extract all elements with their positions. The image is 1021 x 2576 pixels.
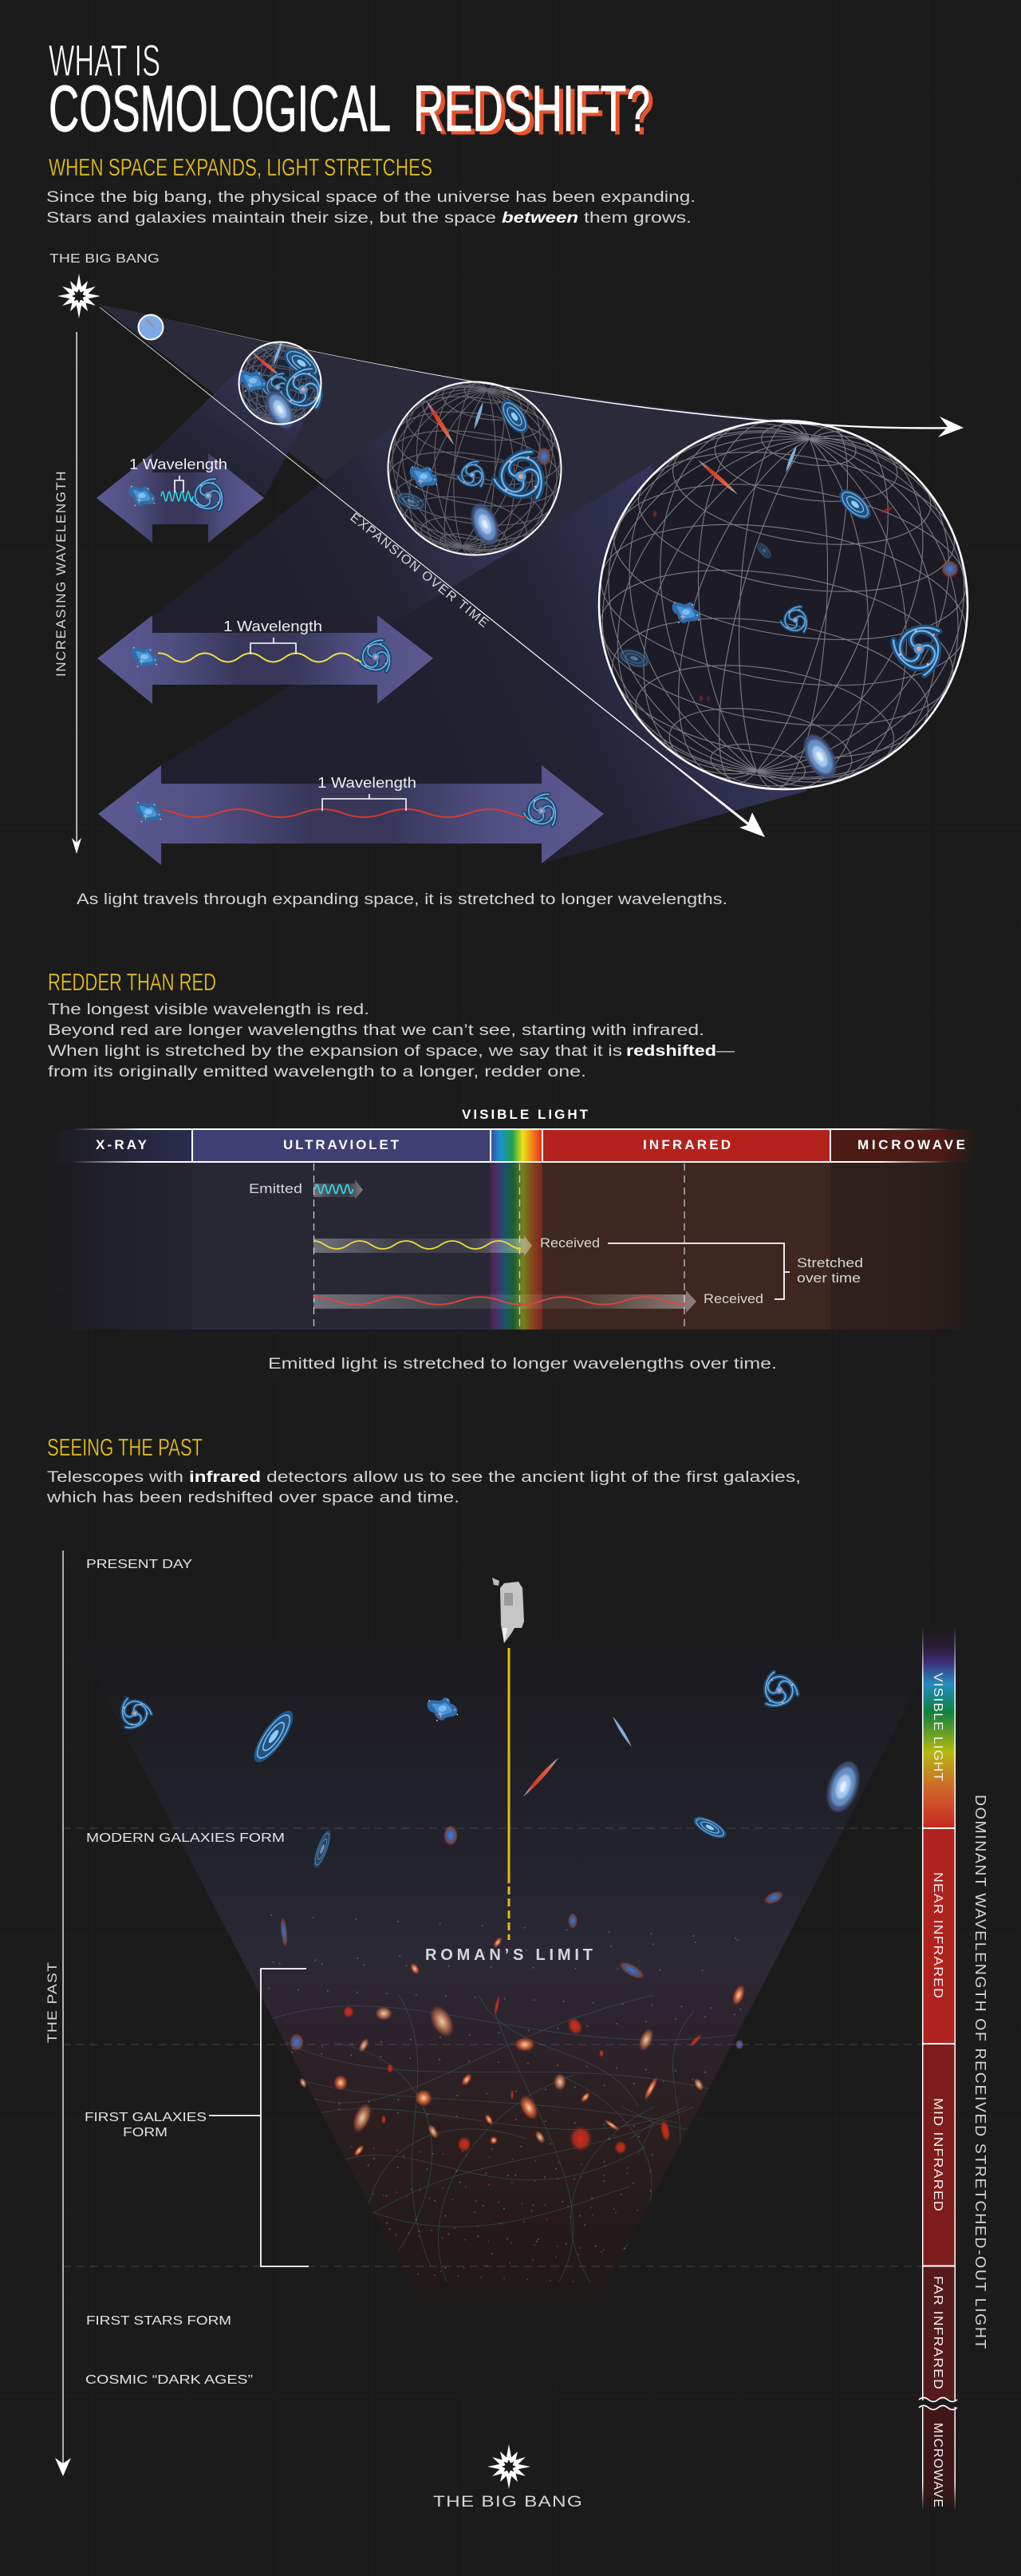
- wavelength bar: [917, 1626, 960, 2511]
- line: expansion over time: [100, 307, 765, 837]
- arrow: increasing wavelength: [53, 332, 81, 854]
- label: visible light: VISIBLE LIGHT: [462, 1107, 589, 1122]
- label: the big bang: THE BIG BANG: [49, 252, 160, 266]
- intro text: them grows.: [584, 210, 692, 227]
- emitted wave: [249, 1179, 363, 1199]
- icon: big bang star lower: [487, 2444, 530, 2489]
- wavelength bar: VISIBLE LIGHT: [931, 1673, 944, 1782]
- galaxies: redshifted: [279, 1888, 786, 2158]
- epoch dashed lines: [63, 1828, 922, 2266]
- timeline labels: PRESENT DAY: [86, 1558, 192, 1571]
- wavelength arrow: medium: 1 Wavelength: [223, 618, 322, 634]
- title: REDSHIFT?: [413, 73, 650, 145]
- arrow: increasing wavelength: INCREASING WAVELENGTH: [53, 470, 69, 677]
- title: COSMOLOGICAL: [49, 73, 391, 145]
- timeline labels: MODERN GALAXIES FORM: [86, 1831, 285, 1845]
- timeline arrow: the past: [45, 1551, 71, 2476]
- intro text: Stars and galaxies maintain their size, but the space: [46, 210, 496, 227]
- wavelength arrow: long: [98, 765, 604, 865]
- redder text: [48, 1002, 735, 1081]
- wavelength bar: FAR INFRARED: [931, 2276, 944, 2390]
- expansion cone: [100, 305, 798, 790]
- curve: expansion upper edge: [97, 303, 964, 437]
- dashed guides: [314, 1164, 684, 1329]
- emitted wave: Emitted: [249, 1181, 302, 1196]
- galaxy: red edge-on: [696, 458, 739, 496]
- intro text: [46, 189, 696, 227]
- label: expansion over time: EXPANSION OVER TIME: [347, 511, 491, 631]
- redder text: The longest visible wavelength is red.: [48, 1002, 369, 1018]
- caption: emitted light: Emitted light is stretched to longer wavelengths over time.: [268, 1356, 777, 1373]
- seeing text: Telescopes with: [47, 1469, 183, 1486]
- wavelength arrow: medium: [97, 615, 433, 704]
- caption: stretching: As light travels through expanding space, it is stretched to longer wavelengths.: [77, 891, 727, 908]
- observation cone: [78, 1644, 940, 2474]
- received wave: red: Received: [704, 1291, 763, 1306]
- light beams: [152, 369, 807, 863]
- label: dominant wavelength: DOMINANT WAVELENGTH OF RECEIVED STRETCHED-OUT LIGHT: [972, 1795, 988, 2350]
- timeline labels: FIRST STARS FORM: [86, 2314, 231, 2328]
- bracket: stretched over time: over time: [797, 1270, 861, 1286]
- title: REDSHIFT?: [417, 76, 654, 148]
- seeing text: infrared: [189, 1469, 261, 1486]
- wavelength bar: NEAR INFRARED: [931, 1872, 944, 1999]
- telescope: [492, 1578, 524, 1643]
- title: [49, 35, 654, 148]
- redder text: from its originally emitted wavelength to a longer, redder one.: [48, 1064, 586, 1081]
- redder text: redshifted: [626, 1043, 716, 1060]
- seeing text: which has been redshifted over space and time.: [46, 1489, 459, 1507]
- wavelength bar: MICROWAVE: [931, 2423, 944, 2508]
- heading: seeing the past: SEEING THE PAST: [47, 1433, 203, 1461]
- intro text: Since the big bang, the physical space of the universe has been expanding.: [46, 189, 696, 206]
- galaxies: present-day: [113, 1665, 865, 1870]
- bracket: first galaxies: [209, 1969, 309, 2266]
- title: WHAT IS: [49, 35, 160, 85]
- wavelength arrow: short: [97, 453, 264, 543]
- sphere: large universe: [507, 334, 1021, 876]
- received wave: yellow: Received: [540, 1235, 600, 1250]
- heading: redder than red: REDDER THAN RED: [48, 968, 216, 996]
- timeline arrow: the past: THE PAST: [45, 1962, 60, 2043]
- redder text: When light is stretched by the expansion of space, we say that it is: [48, 1043, 622, 1060]
- spectrum bar: INFRARED: [643, 1137, 731, 1152]
- timeline labels: FIRST GALAXIES: [85, 2111, 207, 2124]
- sphere: earliest universe: [139, 314, 163, 340]
- intro text: between: [502, 210, 578, 227]
- spectrum bar: X-RAY: [96, 1137, 148, 1152]
- spectrum bar: ULTRAVIOLET: [283, 1137, 400, 1152]
- wavelength arrow: short: 1 Wavelength: [129, 456, 227, 472]
- spectrum bar: [39, 1128, 977, 1163]
- received wave: red: [294, 1290, 763, 1313]
- bracket: stretched over time: [608, 1243, 863, 1299]
- line: roman sight line: [507, 1648, 510, 1940]
- seeing text: detectors allow us to see the ancient light of the first galaxies,: [266, 1469, 801, 1486]
- icon: big bang star: [57, 274, 101, 318]
- redder text: —: [716, 1043, 735, 1060]
- heading: when space expands: WHEN SPACE EXPANDS, LIGHT STRETCHES: [49, 153, 432, 181]
- wavelength arrow: long: 1 Wavelength: [317, 775, 416, 791]
- spectrum columns: [39, 1162, 977, 1329]
- label: roman's limit: ROMAN’S LIMIT: [425, 1946, 593, 1964]
- timeline labels: COSMIC “DARK AGES”: [85, 2373, 253, 2387]
- redder text: Beyond red are longer wavelengths that we can’t see, starting with infrared.: [48, 1022, 704, 1039]
- sphere: small universe: [219, 322, 341, 444]
- timeline labels: FORM: [123, 2126, 168, 2139]
- label: the big bang lower: THE BIG BANG: [433, 2494, 583, 2511]
- timeline labels: [85, 1558, 285, 2387]
- seeing text: [46, 1469, 801, 1507]
- bracket: stretched over time: Stretched: [797, 1255, 863, 1270]
- sphere: medium universe: [345, 341, 605, 596]
- wavelength bar: MID INFRARED: [931, 2098, 944, 2212]
- spectrum bar: MICROWAVE: [857, 1137, 965, 1152]
- received wave: yellow: [302, 1235, 600, 1256]
- cosmic web and dots: [268, 1914, 742, 2282]
